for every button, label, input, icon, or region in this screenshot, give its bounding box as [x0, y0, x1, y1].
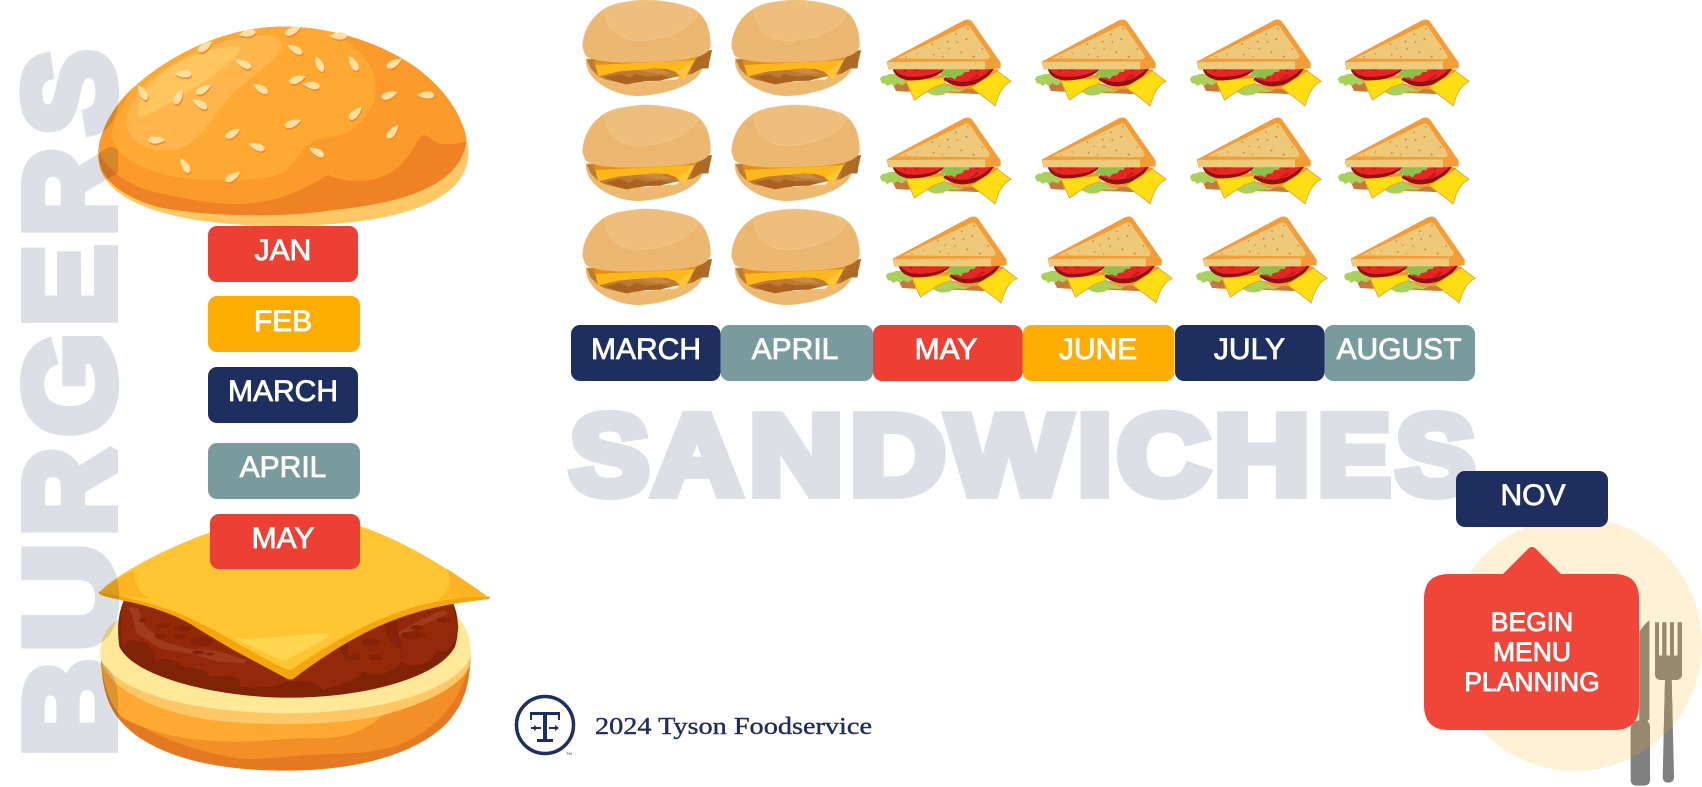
heading: BURGERS vertical watermark: G — [0, 333, 140, 436]
icon: sandwich row 1 column 4 — [1338, 19, 1469, 106]
icon: sandwich row 3 column 4 — [1344, 216, 1475, 303]
icon: plate circle — [1448, 517, 1702, 771]
illustration: burger bottom bun, patty and cheese — [98, 520, 490, 771]
heading: SANDWICHES watermark: D — [850, 393, 945, 519]
heading: SANDWICHES watermark: E — [1318, 393, 1390, 518]
icon: sandwich row 2 column 2 — [1035, 117, 1166, 204]
heading: SANDWICHES watermark: S — [570, 392, 649, 518]
heading: BURGERS vertical watermark — [0, 50, 141, 756]
icon: slider row 3 column 2 — [731, 209, 861, 305]
heading: BURGERS vertical watermark: E — [0, 245, 141, 326]
month label: MAY timeline — [873, 325, 1022, 381]
month label: JAN — [208, 226, 358, 282]
heading: BURGERS vertical watermark: B — [0, 659, 140, 756]
heading: SANDWICHES watermark: C — [1117, 392, 1210, 518]
heading: SANDWICHES watermark: I — [1078, 392, 1112, 518]
month label: MAY — [210, 514, 360, 569]
icon: sandwich row 3 column 3 — [1196, 216, 1327, 303]
month label: JAN: JAN — [255, 234, 311, 267]
illustration: burger top bun with sesame seeds — [98, 26, 468, 226]
heading: SANDWICHES watermark — [570, 391, 1475, 519]
month label: MARCH timeline: MARCH — [591, 333, 701, 366]
month label: JUNE timeline — [1022, 325, 1174, 381]
logo: Tyson T roundel: TM — [566, 751, 572, 756]
icon: slider row 2 column 1 — [582, 105, 712, 201]
icon: slider row 1 column 2 — [731, 0, 861, 96]
month label: APRIL — [208, 443, 360, 499]
heading: SANDWICHES watermark: A — [652, 393, 741, 519]
icon: sandwich row 3 column 1 — [886, 216, 1017, 303]
icon: slider row 1 column 1 — [582, 0, 712, 96]
icon: sandwich row 1 column 1 — [880, 19, 1011, 106]
callout: begin menu planning: MENU — [1493, 637, 1571, 667]
footer text: 2024 Tyson Foodservice: 2024 Tyson Foodservice — [595, 714, 872, 740]
icon: slider row 2 column 2 — [731, 105, 861, 201]
icon: sandwich row 2 column 3 — [1190, 117, 1321, 204]
month label: MARCH timeline — [571, 325, 720, 381]
month label: NOV — [1456, 471, 1608, 527]
month label: APRIL: APRIL — [240, 451, 326, 484]
icon: sandwich row 2 column 1 — [880, 117, 1011, 204]
month label: MARCH: MARCH — [228, 375, 338, 408]
icon: sandwich row 3 column 2 — [1041, 216, 1172, 303]
month label: NOV: NOV — [1500, 479, 1566, 512]
icon: knife and fork — [1631, 621, 1682, 786]
callout: begin menu planning: BEGIN — [1491, 607, 1573, 637]
month label: APRIL timeline: APRIL — [752, 333, 838, 366]
month label: MARCH — [208, 367, 358, 423]
icon: slider row 3 column 1 — [582, 209, 712, 305]
heading: BURGERS vertical watermark: R — [0, 148, 140, 236]
month label: FEB: FEB — [254, 305, 312, 338]
month label: MAY timeline: MAY — [915, 333, 977, 366]
heading: SANDWICHES watermark: W — [948, 391, 1070, 518]
month label: JULY timeline — [1175, 325, 1324, 381]
month label: APRIL timeline — [720, 325, 873, 381]
heading: SANDWICHES watermark: H — [1214, 393, 1310, 519]
icon: sandwich row 1 column 2 — [1035, 19, 1166, 106]
month label: MAY: MAY — [252, 522, 314, 555]
month label: FEB — [208, 296, 360, 352]
month label: JULY timeline: JULY — [1214, 333, 1285, 366]
heading: BURGERS vertical watermark: S — [0, 50, 140, 135]
logo: Tyson T roundel — [516, 696, 574, 756]
heading: SANDWICHES watermark: S — [1396, 392, 1475, 518]
callout: begin menu planning: PLANNING — [1464, 667, 1600, 697]
month label: AUGUST timeline — [1324, 325, 1475, 381]
month label: AUGUST timeline: AUGUST — [1336, 333, 1462, 366]
month label: JUNE timeline: JUNE — [1059, 333, 1137, 366]
icon: sandwich row 2 column 4 — [1338, 117, 1469, 204]
icon: sandwich row 1 column 3 — [1190, 19, 1321, 106]
heading: SANDWICHES watermark: N — [749, 392, 843, 518]
callout: begin menu planning — [1424, 547, 1639, 730]
heading: BURGERS vertical watermark: U — [0, 543, 140, 652]
heading: BURGERS vertical watermark: R — [0, 448, 140, 536]
